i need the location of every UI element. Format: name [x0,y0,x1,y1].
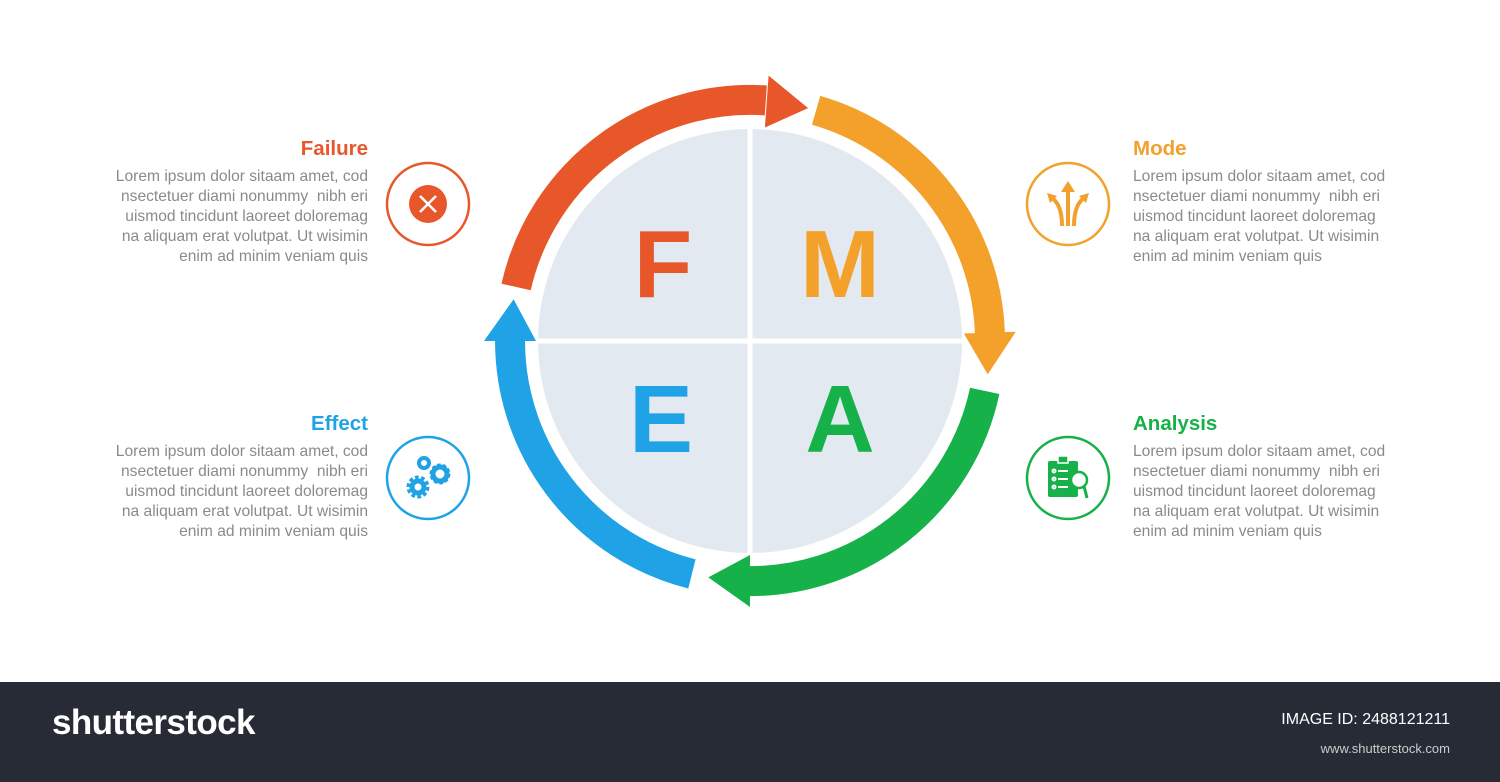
text block: Analysis: uismod tincidunt laoreet doloremag [1133,483,1376,500]
text block: Mode: nsectetuer diami nonummy nibh eri [1133,188,1380,205]
text block: Analysis: nsectetuer diami nonummy nibh eri [1133,463,1380,480]
text block: Failure: na aliquam erat volutpat. Ut wisimin [122,228,368,245]
text block: Failure: nsectetuer diami nonummy nibh eri [121,188,368,205]
icon: mode [1027,163,1109,245]
text block: Mode: Mode [1133,137,1187,160]
text block: Analysis: Analysis [1133,412,1217,435]
arrow: red [516,76,808,287]
pie: FMEA quadrants: F [634,211,692,318]
text block: Mode: enim ad minim veniam quis [1133,248,1322,265]
footer bar [0,682,1500,782]
text block: Mode [1133,137,1385,265]
text block: Failure: enim ad minim veniam quis [179,248,368,265]
icon: effect [387,437,469,519]
text block: Mode: na aliquam erat volutpat. Ut wisimin [1133,228,1379,245]
pie: FMEA quadrants: A [805,366,875,473]
text block: Analysis: enim ad minim veniam quis [1133,523,1322,540]
text block: Failure: Lorem ipsum dolor sitaam amet, cod [116,168,368,185]
arrow: green [708,391,985,607]
pie: FMEA quadrants: E [629,366,693,473]
text block: Effect: nsectetuer diami nonummy nibh eri [121,463,368,480]
text block: Failure: uismod tincidunt laoreet doloremag [125,208,368,225]
footer logo: shutterstock [52,703,255,742]
text block: Analysis: na aliquam erat volutpat. Ut wisimin [1133,503,1379,520]
footer image id: IMAGE ID: 2488121211 [1281,711,1450,728]
pie: FMEA quadrants: M [800,211,880,318]
arrow: blue [484,299,692,574]
text block: Analysis: Lorem ipsum dolor sitaam amet, cod [1133,443,1385,460]
text block: Effect: Effect [311,412,368,435]
text block: Effect [116,412,368,540]
text block: Effect: uismod tincidunt laoreet doloremag [125,483,368,500]
text block: Analysis [1133,412,1385,540]
text block: Mode: Lorem ipsum dolor sitaam amet, cod [1133,168,1385,185]
icon: failure [387,163,469,245]
text block: Mode: uismod tincidunt laoreet doloremag [1133,208,1376,225]
text block: Failure: Failure [301,137,368,160]
arrow: orange [816,110,1016,374]
text block: Effect: enim ad minim veniam quis [179,523,368,540]
footer url: www.shutterstock.com [1321,741,1450,756]
text block: Effect: na aliquam erat volutpat. Ut wisimin [122,503,368,520]
icon: analysis [1027,437,1109,519]
text block: Failure [116,137,368,265]
pie: FMEA quadrants [534,125,966,557]
text block: Effect: Lorem ipsum dolor sitaam amet, cod [116,443,368,460]
